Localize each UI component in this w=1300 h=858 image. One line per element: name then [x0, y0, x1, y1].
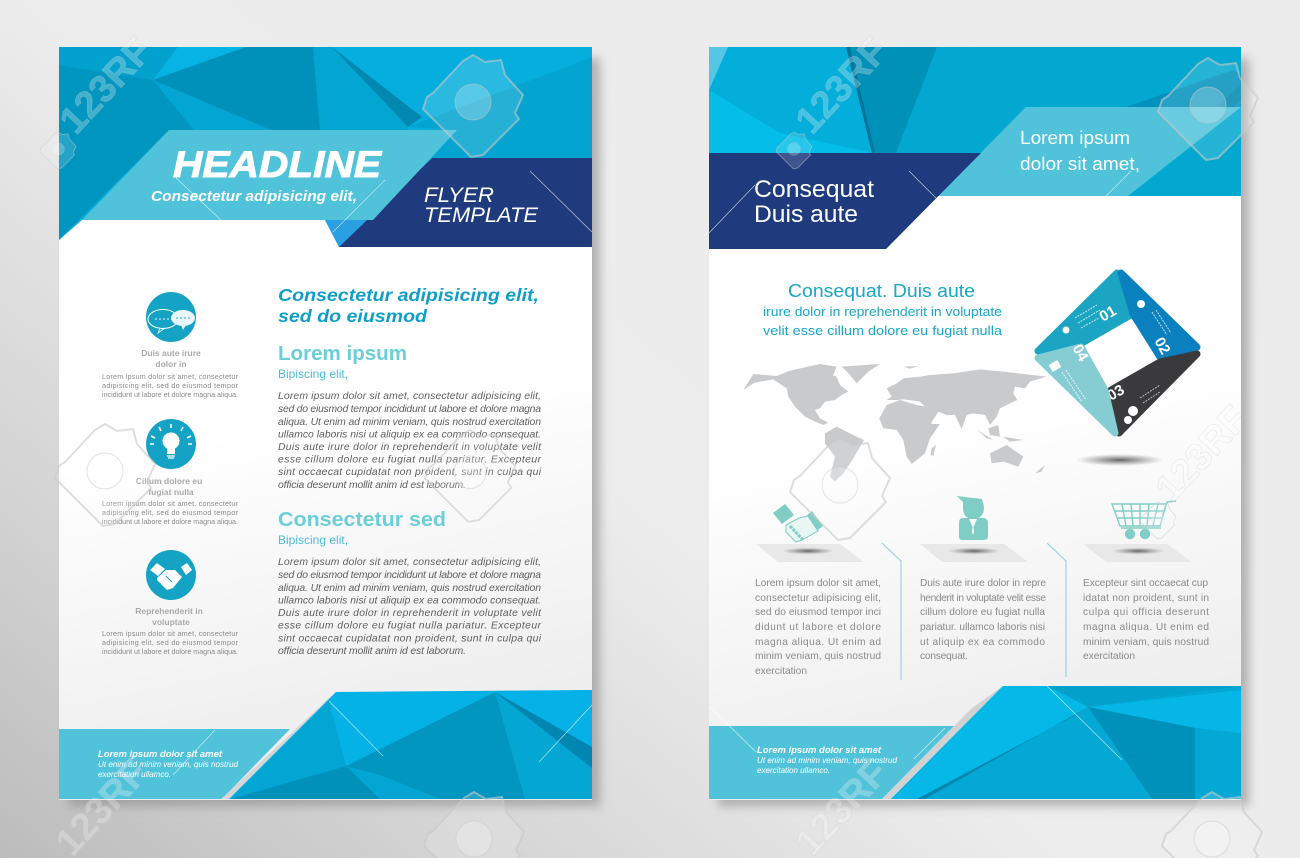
text: feature two: fugiat nulla — [148, 487, 194, 497]
text: feature two: Lorem ipsum dolor sit amet, consectetur — [102, 499, 239, 508]
column two text — [920, 578, 1046, 662]
step 02 — [1121, 273, 1197, 357]
icon: shopping cart — [1112, 501, 1176, 538]
footer text: exercitation ullamco. — [757, 765, 830, 775]
column three text: culpa qui officia deserunt — [1083, 607, 1209, 618]
icon: handshake — [773, 504, 823, 542]
fine diagonal lines — [709, 171, 1131, 233]
column two text: henderit in voluptate velit esse — [920, 593, 1046, 604]
fine diagonal lines — [176, 171, 592, 232]
world map — [743, 364, 1047, 482]
headline: HEADLINE — [173, 144, 382, 185]
text: feature two: Cillum dolore eu — [136, 476, 202, 486]
platform one — [756, 544, 864, 562]
column one text — [755, 578, 881, 677]
intro text: Consequat. Duis aute — [788, 281, 975, 301]
column one text: sed do eiusmod tempor inci — [755, 607, 881, 618]
column two text: consequat. — [920, 651, 968, 662]
text: feature three: incididunt ut labore et dolore magna aliqua. — [102, 647, 238, 656]
platform two — [920, 544, 1028, 562]
body text two: Duis aute irure dolor in reprehenderit in voluptate velit — [278, 608, 542, 619]
column one text: Lorem ipsum dolor sit amet, — [755, 578, 881, 589]
left flyer footer — [59, 690, 592, 799]
page shadows — [68, 58, 1249, 806]
flyer template label — [424, 184, 539, 227]
text: feature one: Duis aute irure — [141, 348, 201, 358]
column three text: minim veniam, quis nostrud — [1083, 637, 1209, 648]
subheadline: Consectetur adipisicing elit, — [151, 189, 357, 205]
intro text: irure dolor in reprehenderit in voluptate — [763, 304, 1002, 319]
column three text: magna aliqua. Ut enim ed — [1083, 622, 1209, 633]
column one text: didunt ut labore et dolore — [755, 622, 881, 633]
text: feature one: adipisicing elit, sed do eiusmod tempor — [102, 381, 239, 390]
footer text — [98, 749, 238, 779]
column three text: exercitation — [1083, 651, 1135, 662]
column three text: Excepteur sint occaecat cup — [1083, 578, 1208, 589]
column three text: idatat non proident, sunt in — [1083, 593, 1209, 604]
footer text: Lorem ipsum dolor sit amet — [98, 749, 223, 760]
body text one: sint occaecat cupidatat non proident, sunt in culpa qui — [278, 467, 542, 478]
text: feature one: incididunt ut labore et dolore magna aliqua. — [102, 390, 238, 399]
text: feature three: Reprehenderit in — [135, 606, 203, 616]
flyer template label: FLYER — [424, 184, 494, 207]
panel: right flyer page — [709, 47, 1241, 800]
body text two: sed do eiusmod tempor incididunt ut labore et dolore magna — [278, 570, 541, 581]
text: feature two — [102, 476, 239, 526]
step 01: 01 — [1096, 302, 1119, 325]
banner text: dolor sit amet, — [1020, 154, 1140, 174]
column one text: exercitation — [755, 666, 807, 677]
column two text: ut aliquip ex ea commodo — [920, 637, 1045, 648]
panel: left flyer page — [59, 47, 592, 800]
section heading: Lorem ipsum: Lorem ipsum — [278, 343, 407, 365]
column one text: consectetur adipisicing elit, — [755, 593, 881, 604]
text: feature one — [102, 348, 239, 399]
text: feature three: adipisicing elit, sed do eiusmod tempor — [102, 638, 239, 647]
watermarks: 123RF — [1148, 398, 1256, 510]
body text two: aliqua. Ut enim ad minim veniam, quis nostrud exercitation — [278, 583, 541, 594]
watermarks: 123RF — [788, 30, 896, 142]
column one text: minim veniam, quis nostrud — [755, 651, 881, 662]
body text one: esse cillum dolore eu fugiat nulla pariatur. Excepteur — [278, 454, 542, 466]
body text one: sed do eiusmod tempor incididunt ut labore et dolore magna — [278, 404, 541, 415]
body text one: Lorem ipsum dolor sit amet, consectetur adipisicing elit, — [278, 391, 541, 402]
body text one: officia deserunt mollit anim id est laborum. — [278, 480, 466, 491]
diamond shadow — [1076, 454, 1164, 466]
body text two: ullamco laboris nisi ut aliquip ex ea commodo consequat. — [278, 596, 541, 606]
body text two: sint occaecat cupidatat non proident, sunt in culpa qui — [278, 634, 542, 644]
right heading — [754, 176, 874, 228]
main heading: Consectetur adipisicing elit, — [278, 285, 539, 305]
platform three — [1083, 544, 1192, 562]
icon: handshake — [146, 550, 196, 600]
footer text: Ut enim ad minim veniam, quis nostrud — [757, 755, 897, 765]
watermarks: 123RF — [52, 30, 160, 142]
right flyer header polygons — [709, 47, 1241, 196]
banner — [938, 107, 1241, 196]
navy block — [339, 158, 592, 247]
icon: speech bubbles — [146, 292, 196, 342]
separators — [882, 543, 1066, 680]
body text one: aliqua. Ut enim ad minim veniam, quis nostrud exercitation — [278, 417, 541, 428]
body text two: Lorem ipsum dolor sit amet, consectetur adipisicing elit, — [278, 557, 541, 568]
icon: light bulb — [146, 419, 196, 469]
subheading: Bipiscing elit, — [278, 367, 348, 381]
column one text: magna aliqua. Ut enim ad — [755, 637, 881, 648]
flyer template label: TEMPLATE — [424, 204, 539, 227]
right heading: Consequat — [754, 176, 874, 203]
navy block — [709, 153, 981, 249]
main heading: sed do eiusmod — [278, 306, 427, 326]
step 03: 03 — [1104, 381, 1127, 404]
text: feature three: voluptate — [152, 617, 190, 627]
step 01 — [1038, 273, 1129, 351]
footer text: Lorem ipsum dolor sit amet — [757, 745, 882, 756]
text: feature three: Lorem ipsum dolor sit amet, consectetur — [102, 629, 239, 638]
icon: business person — [957, 496, 988, 540]
intro text — [763, 281, 1003, 338]
text: feature two: incididunt ut labore et dolore magna aliqua. — [102, 517, 238, 526]
body text one: ullamco laboris nisi ut aliquip ex ea commodo consequat. — [278, 430, 541, 440]
step 04 — [1038, 342, 1115, 433]
column two text: pariatur. ullamco laboris nisi — [920, 622, 1045, 633]
footer text: Ut enim ad minim veniam, quis nostrud — [98, 759, 238, 769]
right flyer footer — [709, 686, 1241, 799]
text: feature one: Lorem ipsum dolor sit amet, consectetur — [102, 372, 239, 381]
left flyer header polygons — [59, 47, 592, 247]
body text two: officia deserunt mollit anim id est laborum. — [278, 646, 466, 657]
footer text — [757, 745, 897, 775]
column three text — [1083, 578, 1209, 662]
banner text: Lorem ipsum — [1020, 128, 1130, 148]
banner text — [1020, 128, 1140, 174]
step 04: 04 — [1069, 342, 1092, 365]
subheading: Bipiscing elit, — [278, 533, 348, 547]
step 03 — [1104, 354, 1197, 433]
main heading — [278, 285, 539, 326]
section heading: Consectetur sed: Consectetur sed — [278, 509, 446, 531]
headline banner — [82, 130, 457, 220]
intro text: velit esse cillum dolore eu fugiat nulla — [763, 323, 1003, 338]
body text two — [278, 557, 542, 657]
body text one: Duis aute irure dolor in reprehenderit in voluptate velit — [278, 442, 542, 453]
column two text: Duis aute irure dolor in repre — [920, 578, 1046, 589]
text: feature one: dolor in — [155, 359, 187, 369]
text: feature two: adipisicing elit, sed do eiusmod tempor — [102, 508, 239, 517]
body text two: esse cillum dolore eu fugiat nulla pariatur. Excepteur — [278, 620, 542, 632]
text: feature three — [102, 606, 239, 656]
diagram: four step diamond — [1038, 273, 1197, 466]
body text one — [278, 391, 542, 491]
step 02: 02 — [1151, 334, 1174, 357]
right heading: Duis aute — [754, 201, 858, 228]
footer text: exercitation ullamco. — [98, 769, 171, 779]
column two text: cillum dolore eu fugiat nulla — [920, 607, 1045, 618]
